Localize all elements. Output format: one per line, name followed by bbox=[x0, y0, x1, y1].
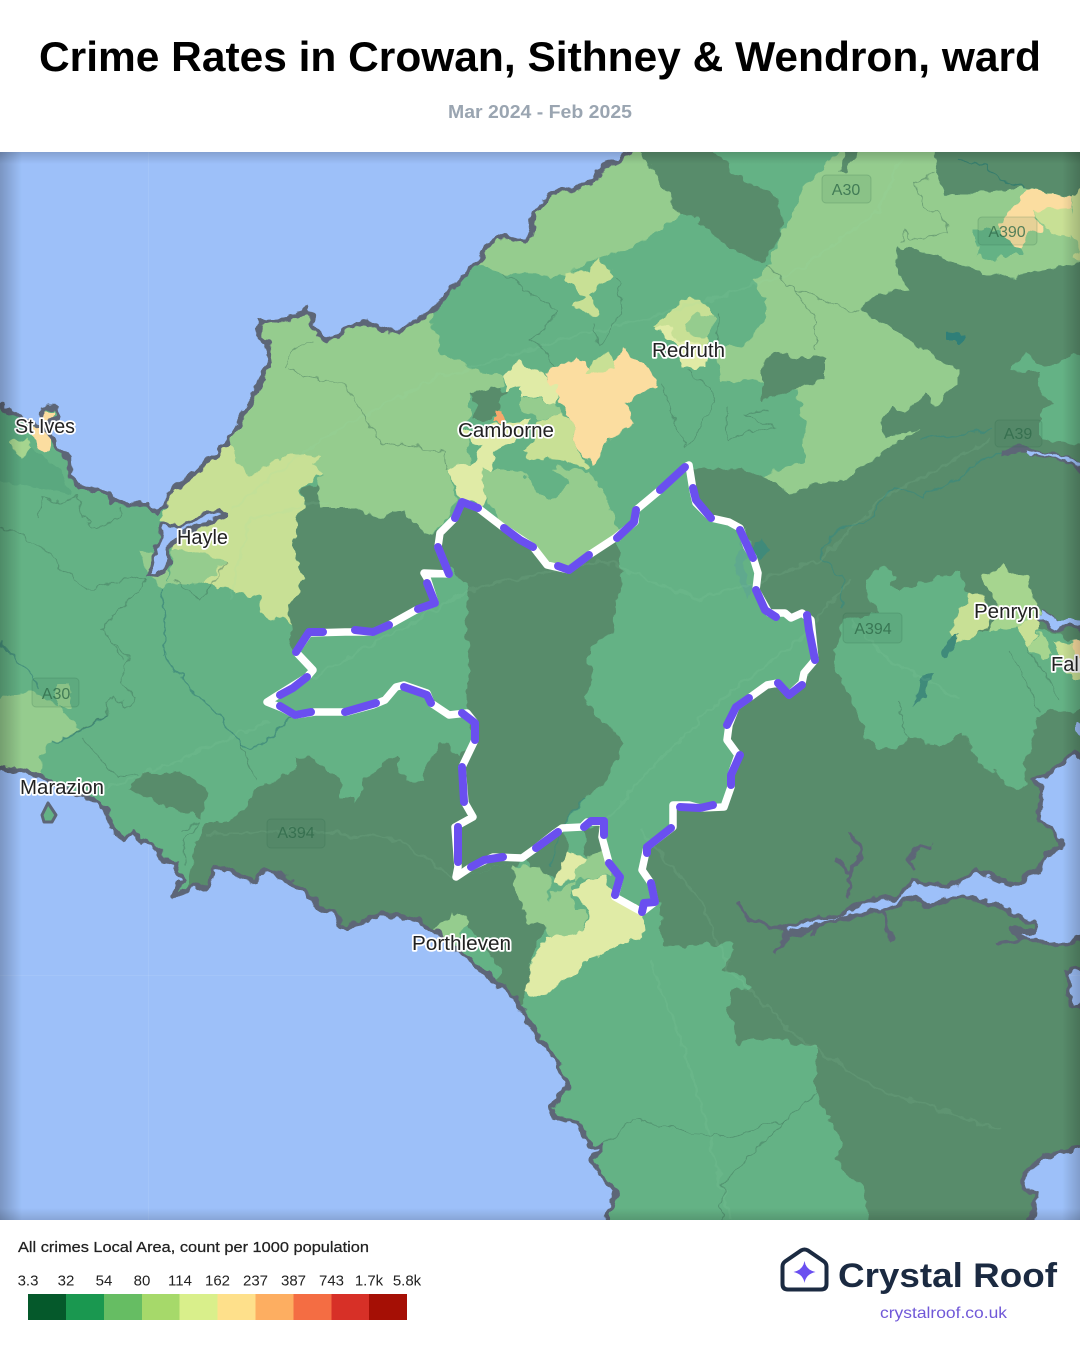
legend colour bar bbox=[28, 1294, 407, 1320]
legend tick labels: 114 bbox=[168, 1272, 192, 1290]
road sign: A30 north: A30 bbox=[832, 182, 860, 199]
legend tick labels: 237 bbox=[243, 1272, 268, 1290]
road sign: A30 west: A30 bbox=[42, 686, 70, 703]
legend tick labels: 743 bbox=[319, 1272, 344, 1290]
legend tick labels: 3.3 bbox=[18, 1272, 38, 1290]
legend tick labels: 54 bbox=[96, 1272, 112, 1290]
legend tick labels: 5.8k bbox=[393, 1272, 422, 1290]
legend bbox=[18, 1239, 422, 1320]
place label: Marazion: Marazion bbox=[20, 777, 104, 799]
wordmark: Crystal Roof bbox=[838, 1257, 1058, 1295]
legend tick labels bbox=[18, 1272, 422, 1290]
legend tick labels: 387 bbox=[281, 1272, 306, 1290]
icon: St Michael's Mount island bbox=[42, 803, 56, 822]
place label: Hayle: Hayle bbox=[177, 527, 228, 549]
road sign: A394 west: A394 bbox=[277, 825, 315, 842]
place label: Penryn: Penryn bbox=[974, 601, 1039, 623]
place label: Camborne: Camborne bbox=[458, 420, 554, 442]
road sign: A394 east bbox=[843, 613, 902, 643]
legend tick labels: 32 bbox=[58, 1272, 74, 1290]
title: Crime Rates in Crowan, Sithney & Wendron, ward bbox=[39, 33, 1041, 80]
area boundaries bbox=[0, 173, 1060, 1220]
road sign: A30 north bbox=[822, 175, 871, 203]
logo: Crystal Roof bbox=[782, 1250, 1058, 1322]
road sign: A394 west bbox=[267, 819, 325, 848]
road sign: A394 east: A394 bbox=[854, 621, 892, 638]
legend tick labels: 1.7k bbox=[355, 1272, 384, 1290]
road sign: A39 bbox=[995, 420, 1042, 447]
website url: crystalroof.co.uk bbox=[880, 1305, 1008, 1322]
ward boundary bbox=[267, 465, 815, 912]
road sign: A30 west bbox=[32, 678, 79, 707]
subtitle: date range: Mar 2024 - Feb 2025 bbox=[448, 101, 632, 122]
icon: house with star bbox=[782, 1250, 826, 1290]
road sign: A390 bbox=[978, 217, 1037, 245]
road sign: A39: A39 bbox=[1004, 426, 1032, 443]
estuaries and creeks bbox=[147, 448, 1080, 953]
place label: Redruth: Redruth bbox=[652, 340, 725, 362]
place label: St Ives: St Ives bbox=[15, 416, 75, 438]
roads bbox=[821, 488, 931, 681]
legend tick labels: 162 bbox=[205, 1272, 230, 1290]
legend tick labels: 80 bbox=[134, 1272, 150, 1290]
legend heading: All crimes Local Area, count per 1000 population bbox=[18, 1239, 369, 1256]
place label: Porthleven: Porthleven bbox=[412, 933, 511, 955]
teal water patches and rivers bbox=[0, 157, 1027, 865]
road sign: A390: A390 bbox=[988, 224, 1026, 241]
